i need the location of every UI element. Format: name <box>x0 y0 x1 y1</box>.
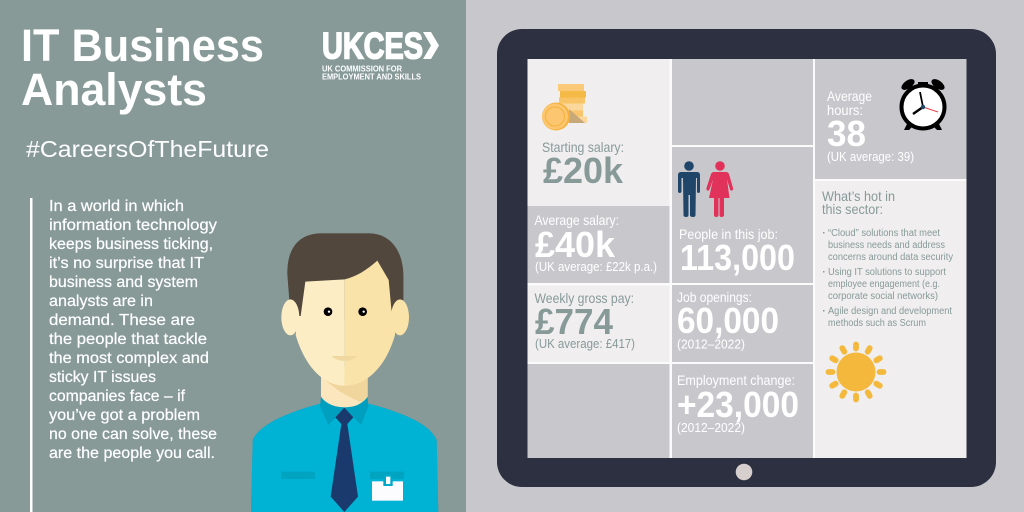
panel: job openings: (2012–2022) <box>677 336 745 352</box>
icon: coins <box>542 84 587 130</box>
icon: alarm clock <box>900 77 946 130</box>
panel: average hours <box>815 59 966 179</box>
intro text: demand. These are <box>49 312 195 329</box>
intro text: information technology <box>49 217 217 234</box>
list of sector trends: employee engagement (e.g. <box>828 279 940 290</box>
panel: weekly gross pay: (UK average: £417) <box>535 336 635 351</box>
panel: starting salary: £20k <box>543 150 624 191</box>
panel: average salary: £40k <box>535 224 616 265</box>
panel: people in this job: 113,000 <box>680 237 795 278</box>
list of sector trends: Using IT solutions to support <box>828 267 946 278</box>
panel: what's hot in this sector <box>815 181 966 458</box>
icon: sun <box>828 344 884 400</box>
logo: UKCES: EMPLOYMENT AND SKILLS <box>322 72 421 82</box>
logo: UKCES <box>322 26 439 82</box>
logo: UKCES: UK COMMISSION FOR <box>322 64 402 74</box>
panel: starting salary: Starting salary: <box>542 139 624 155</box>
panel: empty bottom left <box>528 364 670 458</box>
panel: weekly gross pay: Weekly gross pay: <box>534 290 634 306</box>
panel: job openings: Job openings: <box>677 289 752 305</box>
list of sector trends: “Cloud” solutions that meet <box>828 228 940 239</box>
panel: right background <box>466 0 1024 512</box>
list of sector trends <box>823 228 953 329</box>
panel: weekly gross pay: £774 <box>535 301 613 342</box>
list of sector trends: corporate social networks) <box>828 291 938 302</box>
intro text: the most complex and <box>49 350 209 367</box>
panel: average hours: Average <box>827 88 872 104</box>
panel: average hours: 38 <box>827 113 866 154</box>
panel: average hours: (UK average: 39) <box>827 149 914 164</box>
logo: UKCES: UKCES <box>322 26 423 66</box>
icon: woman <box>706 161 733 217</box>
intro text: it’s no surprise that IT <box>49 255 205 272</box>
illustration: analyst figure <box>251 233 438 512</box>
intro text: you’ve got a problem <box>49 407 200 424</box>
panel: average salary: Average salary: <box>534 212 619 228</box>
title: Analysts <box>21 64 207 115</box>
intro text: no one can solve, these <box>49 426 217 443</box>
panel: employment change: Employment change: <box>677 372 795 388</box>
intro text: the people that tackle <box>49 331 207 348</box>
panel: starting salary <box>528 59 670 206</box>
panel: what's hot in this sector: this sector: <box>822 201 883 217</box>
panel: employment change: (2012–2022) <box>677 420 745 435</box>
panel: employment change <box>672 364 813 458</box>
title: IT Business <box>21 20 264 71</box>
panel: job openings: 60,000 <box>677 300 779 341</box>
intro text <box>49 198 217 462</box>
intro text: keeps business ticking, <box>49 236 213 253</box>
tablet screen <box>528 59 966 458</box>
panel: employment change: +23,000 <box>677 384 799 425</box>
panel: people in this job: People in this job: <box>679 226 778 242</box>
list of sector trends: business needs and address <box>828 240 945 251</box>
panel: what's hot in this sector: What’s hot in <box>822 188 895 204</box>
list of sector trends: concerns around data security <box>828 252 953 263</box>
intro text: companies face – if <box>49 388 186 405</box>
intro text: analysts are in <box>49 293 153 310</box>
intro text: sticky IT issues <box>49 369 156 386</box>
intro text: business and system <box>49 274 198 291</box>
panel: average hours: hours: <box>827 102 863 118</box>
panel: left background <box>0 0 466 512</box>
panel: weekly gross pay <box>528 286 670 362</box>
intro text: are the people you call. <box>49 445 215 462</box>
icon: man <box>678 161 700 217</box>
tablet home button <box>736 464 752 480</box>
panel: job openings <box>672 285 813 362</box>
hashtag: #CareersOfTheFuture <box>26 136 269 162</box>
list of sector trends: Agile design and development <box>828 306 952 317</box>
panel: empty top middle <box>672 59 813 145</box>
accent bar <box>30 198 32 512</box>
title <box>21 20 264 115</box>
panel: average salary: (UK average: £22k p.a.) <box>535 259 657 274</box>
list of sector trends: methods such as Scrum <box>828 318 926 329</box>
intro text: In a world in which <box>49 198 184 215</box>
tablet frame <box>497 29 996 487</box>
panel: people in this job <box>672 147 813 283</box>
panel: average salary <box>528 206 670 283</box>
